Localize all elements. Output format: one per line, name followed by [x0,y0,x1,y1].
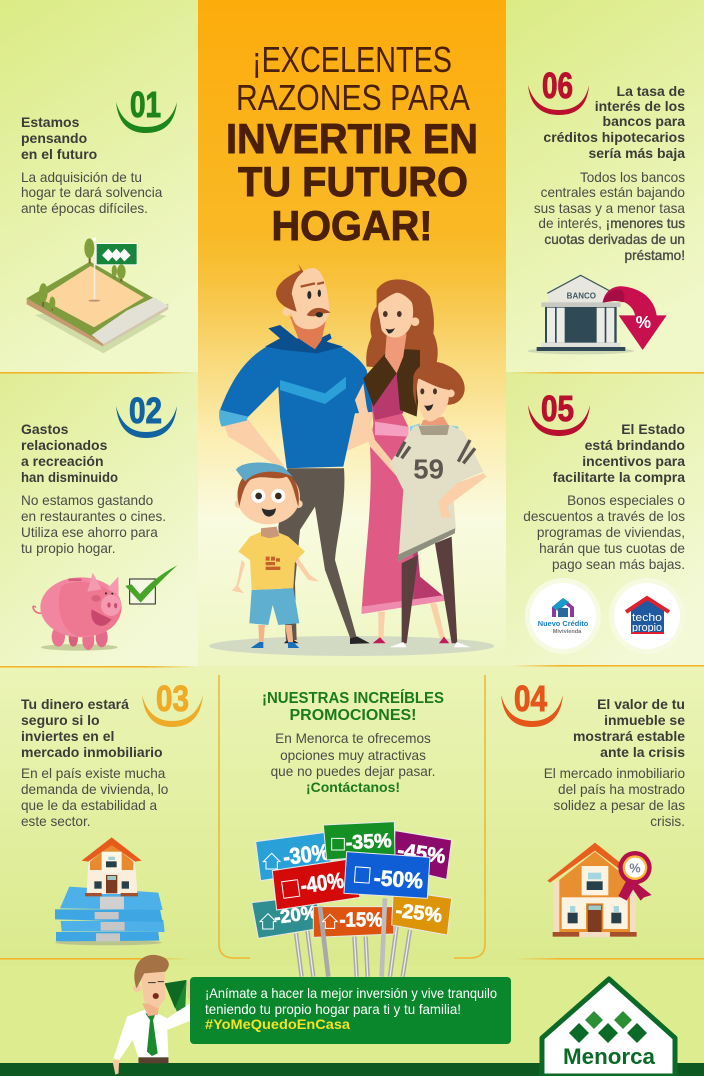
heading 06: sería más baja [588,145,685,161]
heading 05: facilitarte la compra [553,469,685,485]
discount signs: -45% [396,839,447,868]
daughter: 59 [413,453,444,484]
icon: bank with falling rate arrow [527,275,667,354]
number badge 02: 02 [129,390,162,431]
discount signs: -35% [345,830,392,854]
discount signs: -50% [373,865,424,893]
text 02 [21,493,166,556]
family illustration [209,264,494,656]
discount signs: -40% [299,867,345,898]
heading 04: mostrará estable [573,728,685,744]
heading 06: interés de los [595,98,685,114]
call to action box: ¡Anímate a hacer la mejor inversión y vive tranquilo [205,985,497,1001]
number badge 06 [528,65,589,115]
heading 04: ante la crisis [600,744,685,760]
panel: 03 safe money [21,678,203,945]
number badge 04: 04 [514,678,547,719]
son [232,463,319,648]
text 03: que le da estabilidad a [21,798,157,813]
promotions heading: ¡NUESTRAS INCREÍBLES [262,688,444,707]
call to action box: #YoMeQuedoEnCasa [205,1016,350,1032]
Menorca logo [542,979,675,1076]
promotions text: opciones muy atractivas [280,748,426,763]
icon: bank with falling rate arrow: % [636,312,651,332]
number badge 05 [528,388,590,436]
heading 03 [21,696,163,760]
heading 06: bancos para [603,113,685,129]
text 03: demanda de vivienda, lo [21,782,168,797]
text 05: pago sean más bajas. [552,557,685,572]
text 04 [544,766,685,829]
title [226,39,478,249]
number badge 05: 05 [541,388,574,429]
promotions text: ¡Contáctanos! [306,779,400,795]
panel: 05 state incentives [523,388,685,654]
promotions text: En Menorca te ofrecemos [275,731,431,746]
heading 03: seguro si lo [21,712,100,728]
number badge 03 [142,678,203,727]
title: ¡EXCELENTES [252,39,452,80]
number badge 06: 06 [542,65,573,106]
heading 01: en el futuro [21,146,97,162]
text 03: este sector. [21,814,91,829]
heading 01 [21,114,97,162]
number badge 03: 03 [156,678,189,719]
text 01: hogar te dará solvencia [21,185,163,200]
heading 01: pensando [21,130,87,146]
text 05: Bonos especiales o [567,493,685,508]
heading 05: incentivos para [582,453,685,469]
heading 05: El Estado [621,421,685,437]
text 06 [534,170,685,263]
heading 03: Tu dinero estará [21,696,129,712]
text 05 [523,493,685,572]
text 03: En el país existe mucha [21,766,166,781]
text 06: centrales están bajando [541,185,685,200]
heading 02 [21,421,118,485]
heading 06 [543,83,685,161]
text 01 [21,170,163,216]
text 02: Utiliza ese ahorro para [21,525,158,540]
text 04: El mercado inmobiliario [544,766,685,781]
heading 02: relacionados [21,437,108,453]
logo: Nuevo Crédito Mivivienda: Mivivienda [553,629,582,635]
text 05: harán que tus cuotas de [539,541,685,556]
call to action box: teniendo tu propio hogar para ti y tu familia! [205,1001,461,1017]
discount signs: -20% [273,901,319,928]
title: INVERTIR EN [226,115,478,162]
heading 01: Estamos [21,114,80,130]
text 06: de interés, ¡menores tus [538,216,685,231]
businessman with megaphone [112,955,196,1075]
Menorca logo: Menorca [563,1044,656,1069]
discount signs: -25% [394,900,444,927]
discount signs: -15% [339,910,383,932]
number badge 01: 01 [130,84,161,125]
heading 03: inviertes en el [21,728,114,744]
discount signs [252,822,452,977]
heading 06: La tasa de [617,83,685,99]
text 06: sus tasas y a menor tasa [534,201,685,216]
logo: Nuevo Crédito Mivivienda [525,578,601,654]
icon: house with ribbon: % [629,861,641,875]
discount signs: -30% [281,838,331,870]
panel: 01 future [21,84,177,353]
title: HOGAR! [272,202,432,249]
title: RAZONES PARA [236,77,470,118]
text 01: ante épocas difíciles. [21,201,148,216]
text 04: solidez a pesar de las [554,798,685,813]
heading 06: créditos hipotecarios [543,129,685,145]
text 06: cuotas derivadas de un [544,232,685,247]
text 01: La adquisición de tu [21,170,142,185]
mother [355,279,449,643]
panel: promotions [219,675,485,977]
text 02: en restaurantes o cines. [21,509,166,524]
number badge 04 [501,678,563,727]
heading 05 [553,421,685,485]
text 05: programas de viviendas, [537,525,685,540]
heading 02: Gastos [21,421,69,437]
promotions frame [219,675,485,958]
logo: Techo Propio: propio [632,622,662,634]
panel: 06 bank rate [527,65,685,354]
footer bar [0,1063,704,1076]
logo: Techo Propio [609,578,685,654]
promotions heading [262,688,444,724]
heading 04: inmueble se [604,712,685,728]
title: TU FUTURO [238,158,468,205]
number badge 02 [116,390,177,438]
panel: 04 property value [501,678,685,937]
text 04: del país ha mostrado [558,782,685,797]
heading 04: El valor de tu [597,696,685,712]
ground shadow [209,636,494,656]
heading 03: mercado inmobiliario [21,744,163,760]
icon: bank with falling rate arrow: BANCO [567,292,596,301]
icon: piggy bank with check [33,565,177,651]
logo: Techo Propio: techo [632,612,662,624]
heading 05: está brindando [585,437,685,453]
icon: house with ribbon [547,843,652,937]
logo: Nuevo Crédito Mivivienda: Nuevo Crédito [538,619,589,628]
text 02: tu propio hogar. [21,541,115,556]
text 02: No estamos gastando [21,493,153,508]
number badge 01 [116,84,177,133]
text 04: crisis. [650,814,685,829]
promotions heading: PROMOCIONES! [290,707,416,724]
text 06: préstamo! [625,248,685,263]
text 06: Todos los bancos [580,170,685,185]
text 05: descuentos a través de los [523,509,685,524]
promotions text [271,731,435,795]
daughter [389,362,487,647]
heading 02: han disminuido [21,469,118,485]
icon: land lot with flag [27,237,168,353]
heading 02: a recreación [21,453,104,469]
promotions text: que no puedes dejar pasar. [271,764,435,779]
father [219,264,375,644]
panel: 02 recreation [21,390,177,651]
icon: house on money stacks [55,837,165,945]
call to action box [190,977,511,1044]
heading 04 [573,696,685,760]
text 03 [21,766,168,829]
